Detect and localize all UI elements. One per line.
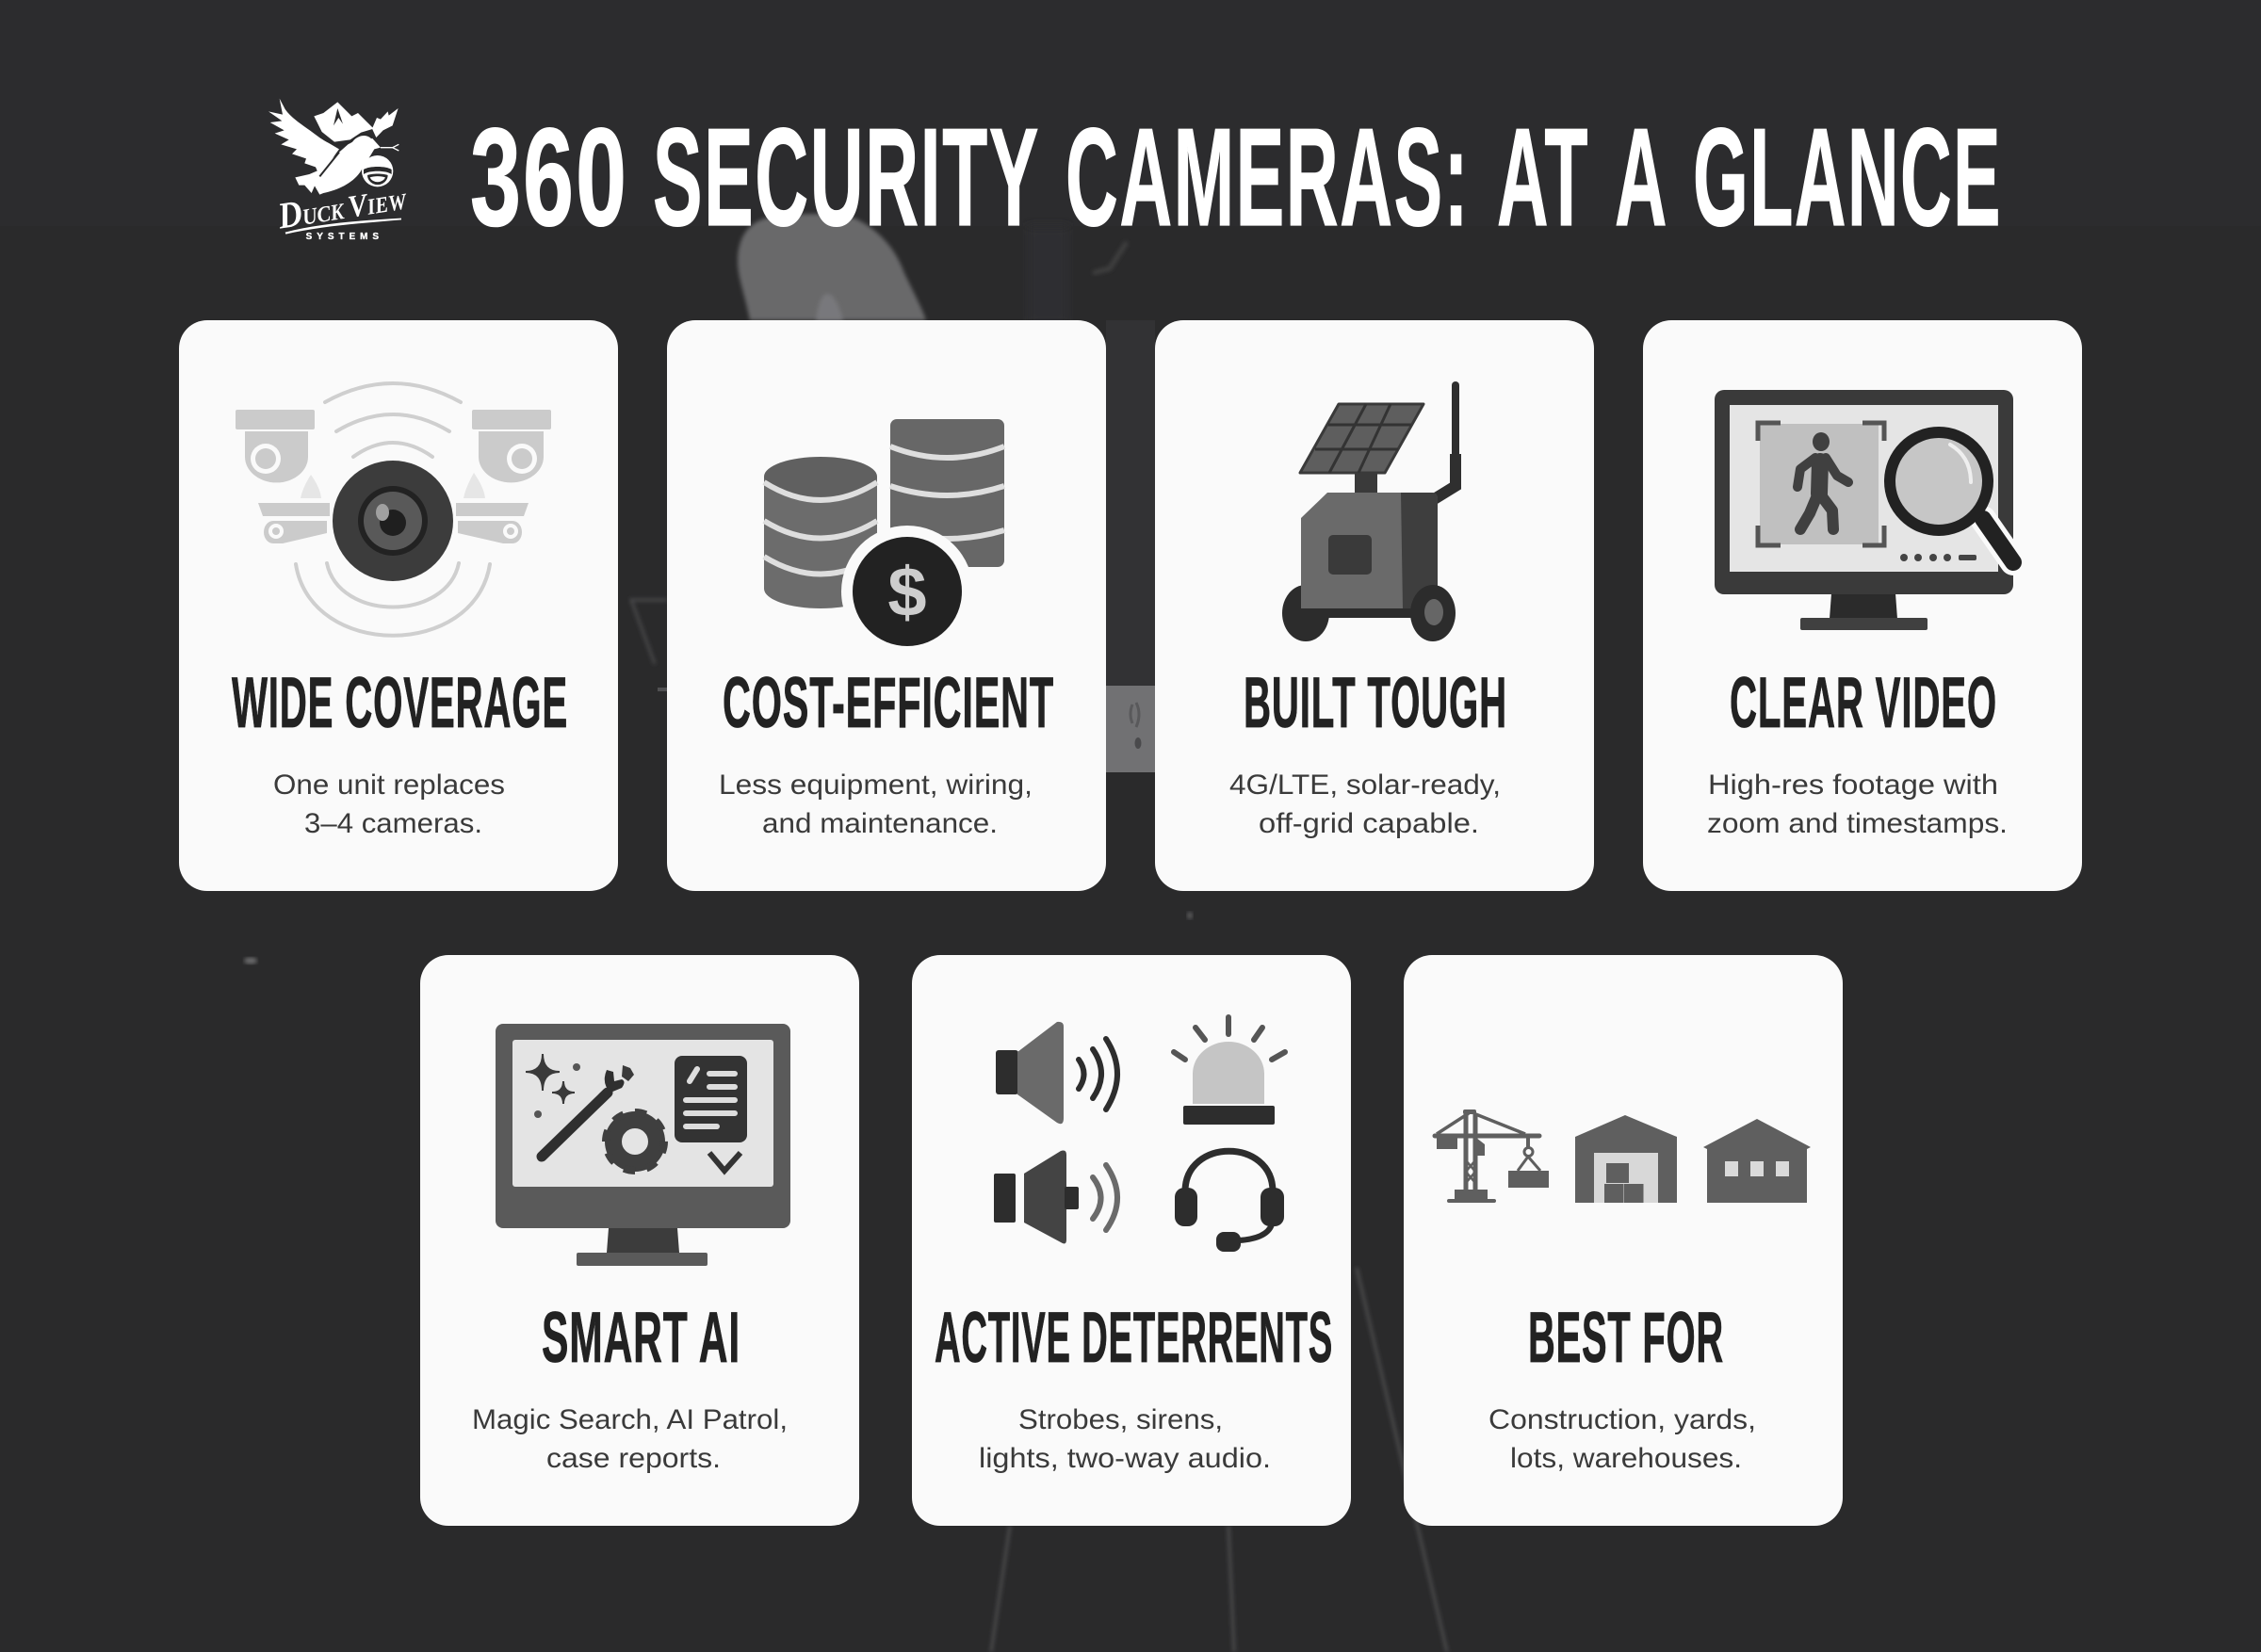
panel: smart AI (420, 955, 859, 1526)
icon: solar powered mobile unit (1282, 385, 1456, 641)
heading: SMART AI (542, 1298, 740, 1378)
description (1707, 769, 2008, 839)
description: off-grid capable. (1259, 808, 1479, 839)
description: 3–4 cameras. (304, 808, 482, 839)
heading: WIDE COVERAGE (232, 663, 568, 743)
description (1488, 1404, 1756, 1474)
description: Magic Search, AI Patrol, (472, 1404, 788, 1435)
description: High-res footage with (1708, 769, 1998, 801)
title: SECURITY (653, 100, 1040, 255)
icon: tower crane (1435, 1109, 1549, 1203)
panel: wide coverage (179, 320, 618, 891)
description (719, 769, 1033, 839)
title (470, 100, 2002, 255)
description: Strobes, sirens, (1018, 1404, 1223, 1435)
description: 4G/LTE, solar-ready, (1229, 769, 1501, 801)
panel: clear video (1643, 320, 2082, 891)
description: lights, two-way audio. (979, 1443, 1271, 1474)
description: zoom and timestamps. (1707, 808, 2008, 839)
description (273, 769, 505, 839)
heading: ACTIVE DETERRENTS (935, 1298, 1333, 1378)
icon: strobe speaker (996, 1022, 1117, 1124)
panel: cost-efficient (667, 320, 1106, 891)
icon: 360 camera with surrounding cameras (236, 383, 551, 636)
logo: Duck View Systems (268, 99, 410, 242)
panel: active deterrents (912, 955, 1351, 1526)
icon: coin stacks with dollar: $ (887, 553, 927, 631)
description: Construction, yards, (1488, 1404, 1756, 1435)
title: AT (1497, 100, 1589, 255)
icon: siren beacon (1174, 1017, 1285, 1125)
title: CAMERAS: (1065, 100, 1470, 255)
description: lots, warehouses. (1510, 1443, 1742, 1474)
heading: CLEAR VIDEO (1730, 663, 1997, 743)
heading: BUILT TOUGH (1244, 663, 1507, 743)
icon: monitor with AI tools (496, 1024, 790, 1266)
heading: COST-EFFICIENT (723, 663, 1054, 743)
description: Less equipment, wiring, (719, 769, 1033, 801)
title: 360 (470, 100, 628, 255)
title: A (1615, 100, 1668, 255)
description (1229, 769, 1501, 839)
icon: warehouse with open door (1575, 1115, 1677, 1203)
icon: warehouse with windows (1703, 1119, 1811, 1203)
heading: BEST FOR (1528, 1298, 1724, 1378)
description: case reports. (546, 1443, 721, 1474)
icon: coin stacks with dollar (764, 419, 1004, 657)
icon: headset (1175, 1151, 1284, 1252)
description (979, 1404, 1271, 1474)
icon: speaker with audio waves (994, 1151, 1117, 1243)
description: and maintenance. (762, 808, 998, 839)
icon: duck with camera (268, 99, 399, 195)
panel: best for (1404, 955, 1843, 1526)
description (472, 1404, 788, 1474)
description: One unit replaces (273, 769, 505, 801)
SYSTEMS tagline: SYSTEMS (306, 232, 379, 242)
icon: monitor with person detection and magnifier (1715, 390, 2013, 630)
panel: built tough (1155, 320, 1594, 891)
wordmark: DUCK VIEW (274, 175, 410, 237)
